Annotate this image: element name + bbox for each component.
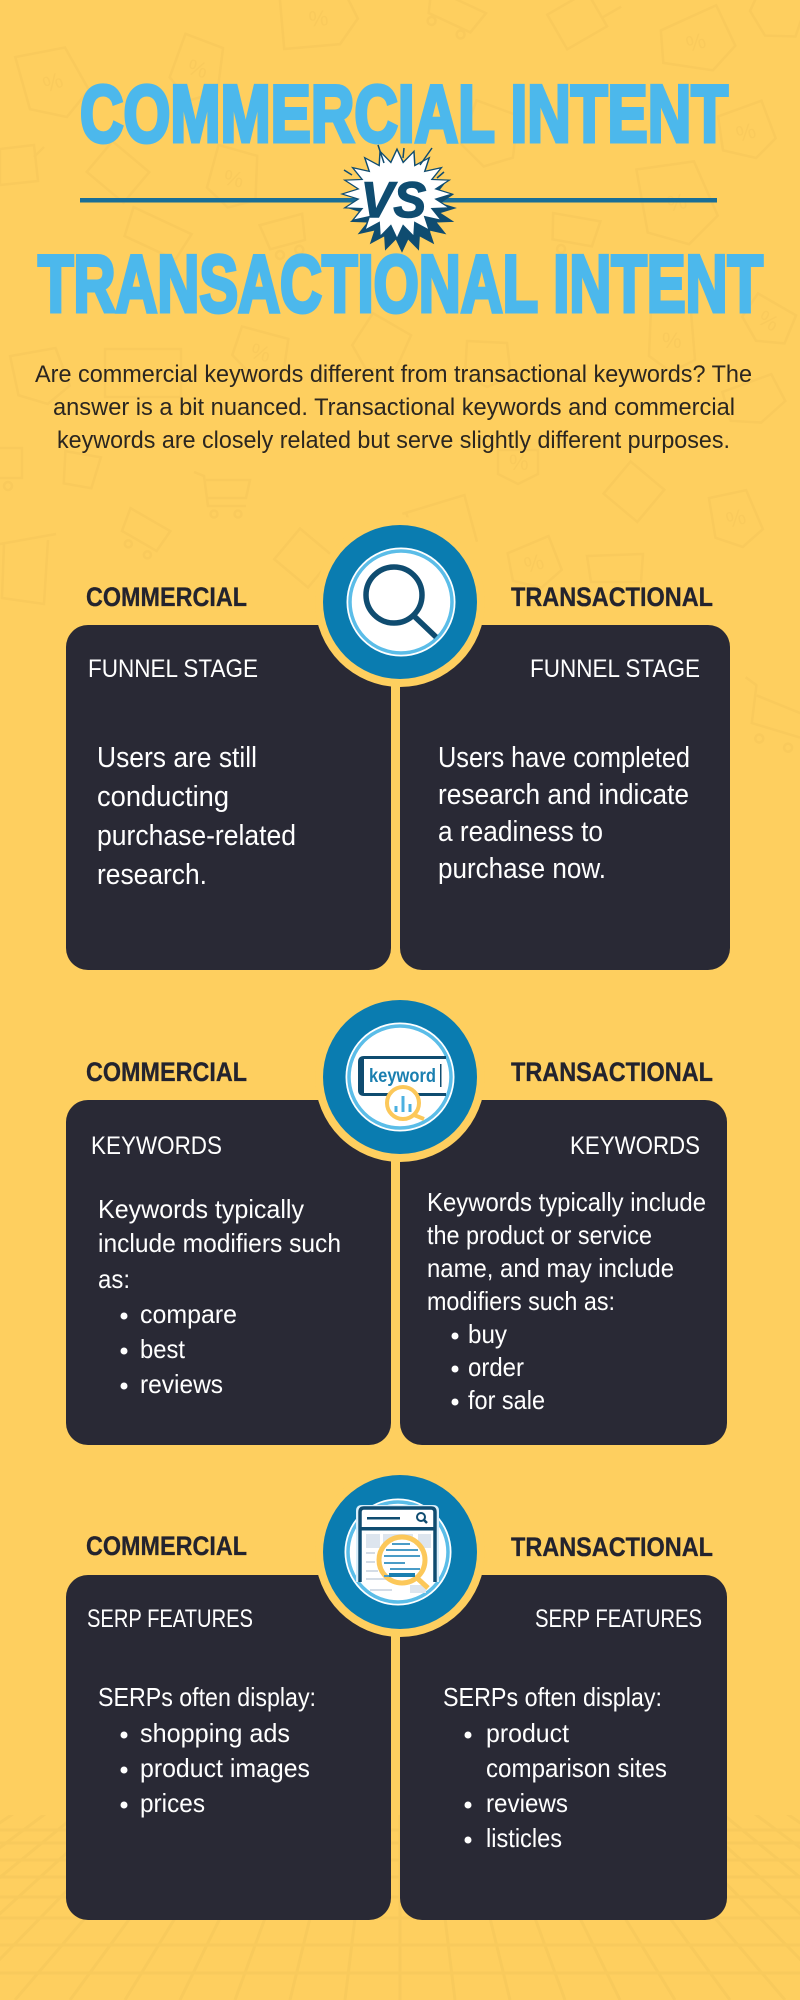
panel: transactional keywords: for sale xyxy=(468,1385,545,1415)
background pattern: price tags and carts: % xyxy=(39,67,66,97)
vs starburst badge: VS xyxy=(361,172,426,228)
panel: transactional funnel stage: a readiness to xyxy=(438,816,603,848)
intro paragraph: keywords are closely related but serve slightly different purposes. xyxy=(57,427,730,454)
background pattern: price tags and carts: % xyxy=(662,328,682,353)
panel: transactional serp features xyxy=(400,1575,727,1920)
section 3 left heading: COMMERCIAL xyxy=(86,1531,247,1561)
panel: transactional funnel stage: FUNNEL STAGE xyxy=(530,655,700,683)
panel: transactional funnel stage: Users have completed xyxy=(438,742,690,774)
panel: transactional keywords: Keywords typically include xyxy=(427,1187,706,1217)
panel: commercial funnel stage xyxy=(66,625,391,970)
panel: transactional keywords: name, and may include xyxy=(427,1253,674,1283)
panel: commercial serp features: prices xyxy=(140,1788,205,1818)
background pattern: price tags and carts: % xyxy=(521,549,547,578)
section 2 right heading: TRANSACTIONAL xyxy=(511,1057,713,1087)
background pattern: price tags and carts: % xyxy=(683,28,709,57)
panel: transactional funnel stage: research and indicate xyxy=(438,779,689,811)
background pattern: price tags and carts: % xyxy=(185,54,210,83)
background pattern: price tags and carts: % xyxy=(754,305,783,337)
panel: commercial keywords xyxy=(66,1100,391,1445)
panel: commercial serp features: SERP FEATURES xyxy=(87,1605,253,1633)
panel: commercial funnel stage: Users are still xyxy=(97,742,257,774)
panel: transactional keywords: the product or service xyxy=(427,1220,652,1250)
panel: commercial keywords: compare xyxy=(140,1299,237,1329)
panel: transactional keywords xyxy=(400,1100,727,1445)
panel: commercial keywords: KEYWORDS xyxy=(91,1132,222,1160)
panel: transactional keywords: order xyxy=(468,1352,524,1382)
panel: transactional serp features: SERP FEATURES xyxy=(535,1605,702,1633)
icon: magnifying glass badge xyxy=(315,517,485,700)
icon: keyword search badge: keyword xyxy=(369,1066,436,1087)
panel: transactional funnel stage xyxy=(400,625,730,970)
panel: commercial serp features: SERPs often display: xyxy=(98,1682,316,1712)
background pattern: price tags and carts: % xyxy=(733,118,759,147)
divider line with VS xyxy=(80,198,717,202)
panel: transactional serp features: listicles xyxy=(486,1823,562,1853)
intro paragraph xyxy=(35,361,752,454)
icon: search results page badge xyxy=(315,1467,485,1650)
panel: commercial keywords: reviews xyxy=(140,1369,223,1399)
background pattern: price tags and carts: % xyxy=(723,504,749,533)
intro paragraph: Are commercial keywords different from transactional keywords? The xyxy=(35,361,752,388)
panel: commercial funnel stage: purchase-related xyxy=(97,820,296,852)
panel: commercial serp features: product images xyxy=(140,1753,310,1783)
background pattern: price tags and carts: % xyxy=(222,165,245,193)
panel: transactional keywords: KEYWORDS xyxy=(570,1132,700,1160)
panel: commercial funnel stage: conducting xyxy=(97,781,229,813)
background pattern: price tags and carts: % xyxy=(248,338,273,367)
panel: commercial serp features xyxy=(66,1575,391,1920)
panel: commercial keywords: as: xyxy=(98,1264,130,1294)
icon: keyword search badge xyxy=(315,992,485,1175)
panel: commercial keywords: Keywords typically xyxy=(98,1194,304,1224)
panel: commercial funnel stage: research. xyxy=(97,859,207,891)
section 2 left heading: COMMERCIAL xyxy=(86,1057,247,1087)
intro paragraph: answer is a bit nuanced. Transactional keywords and commercial xyxy=(53,394,735,421)
background pattern: price tags and carts: % xyxy=(665,188,689,217)
section 1 left heading: COMMERCIAL xyxy=(86,582,247,612)
panel: transactional serp features: reviews xyxy=(486,1788,568,1818)
panel: transactional funnel stage: purchase now. xyxy=(438,853,606,885)
panel: transactional serp features: comparison sites xyxy=(486,1753,667,1783)
panel: transactional keywords: modifiers such as: xyxy=(427,1286,615,1316)
background pattern: price tags and carts: % xyxy=(308,5,329,32)
panel: transactional keywords: buy xyxy=(468,1319,507,1349)
background pattern: price tags and carts xyxy=(0,0,800,754)
vs starburst badge xyxy=(342,145,457,253)
background pattern: perspective floor grid xyxy=(0,1550,800,2000)
panel: commercial serp features: shopping ads xyxy=(140,1718,290,1748)
panel: commercial keywords: include modifiers such xyxy=(98,1228,341,1258)
panel: commercial funnel stage: FUNNEL STAGE xyxy=(88,655,258,683)
panel: transactional serp features: SERPs often display: xyxy=(443,1682,662,1712)
section 1 right heading: TRANSACTIONAL xyxy=(511,582,713,612)
background pattern: price tags and carts: % xyxy=(509,450,529,475)
panel: transactional serp features: product xyxy=(486,1718,570,1748)
panel: commercial keywords: best xyxy=(140,1334,186,1364)
section 3 right heading: TRANSACTIONAL xyxy=(511,1532,713,1562)
